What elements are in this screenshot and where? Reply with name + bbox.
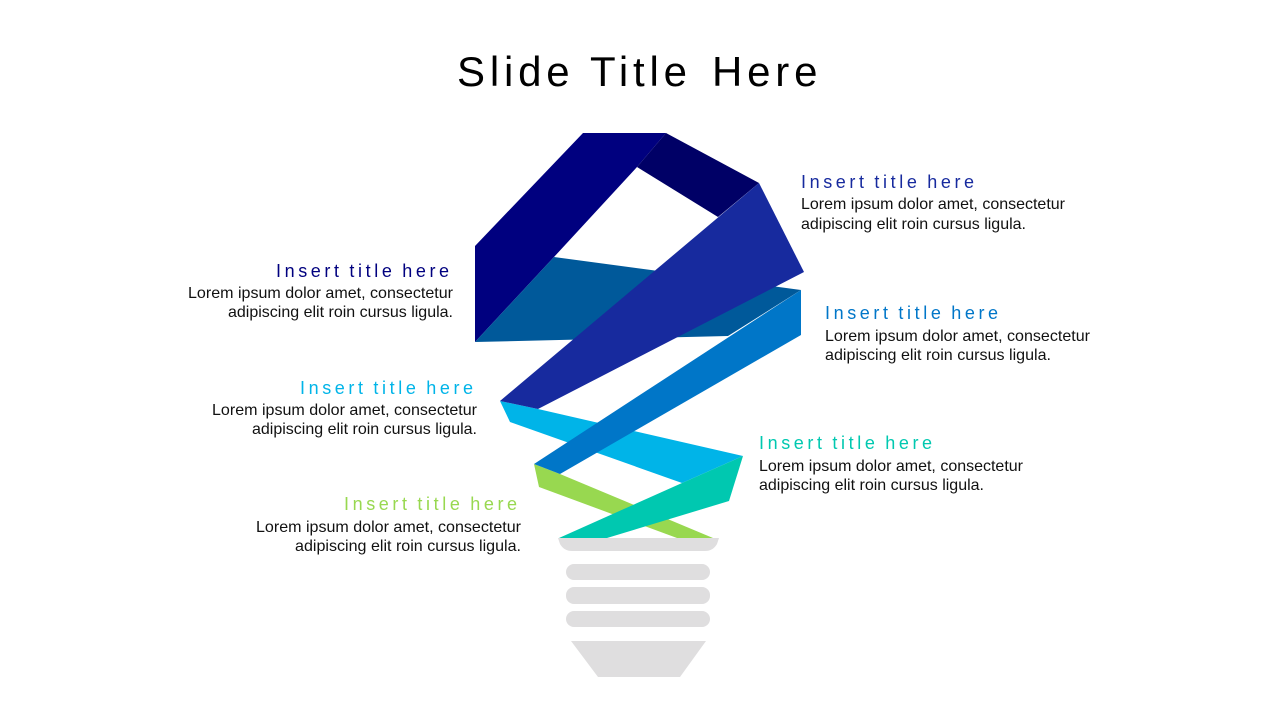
text block: green: adipiscing elit roin cursus ligula.: [295, 538, 521, 555]
title: Slide: [457, 48, 574, 95]
text block: teal: Insert title here: [759, 433, 936, 453]
bulb ribbon: teal segment: [559, 456, 743, 538]
text block: teal: adipiscing elit roin cursus ligula.: [759, 477, 984, 494]
bulb ribbon: sky blue segment: [500, 401, 743, 483]
text block: teal: Lorem ipsum dolor amet, consectetur: [759, 458, 1024, 475]
bulb ribbon: mid blue segment: [534, 290, 801, 474]
text block: sky blue: adipiscing elit roin cursus ligula.: [252, 421, 477, 438]
title: Title: [590, 48, 692, 95]
light bulb graphic: [475, 133, 804, 677]
bulb base: tip: [571, 641, 706, 677]
text block: sky blue: Lorem ipsum dolor amet, consectetur: [212, 402, 478, 419]
text block: sky blue: Insert title here: [300, 378, 477, 398]
text block: navy: Insert title here: [276, 261, 453, 281]
text block: royal blue: [801, 172, 1066, 233]
text block: mid blue: Lorem ipsum dolor amet, consectetur: [825, 328, 1091, 345]
bulb ribbon: dark navy segment: [637, 133, 759, 217]
text block: navy: Lorem ipsum dolor amet, consectetur: [188, 285, 454, 302]
title: Here: [712, 48, 822, 95]
text block: sky blue: [212, 378, 478, 438]
bulb base: collar: [558, 538, 719, 551]
text block: teal: [759, 433, 1024, 494]
text block: mid blue: adipiscing elit roin cursus ligula.: [825, 347, 1051, 364]
text block: green: Lorem ipsum dolor amet, consectetur: [256, 519, 522, 536]
text block: royal blue: adipiscing elit roin cursus ligula.: [801, 216, 1026, 233]
bulb ribbon: steel blue segment: [475, 257, 801, 342]
bulb ribbon: navy segment: [475, 133, 666, 342]
bulb base: thread 3: [566, 611, 710, 627]
text block: royal blue: Insert title here: [801, 172, 978, 192]
text block: mid blue: [825, 303, 1091, 364]
bulb ribbon: royal blue segment: [500, 183, 804, 409]
text block: navy: adipiscing elit roin cursus ligula.: [228, 304, 453, 321]
text block: green: Insert title here: [344, 494, 521, 514]
bulb ribbon: green segment: [534, 464, 713, 538]
text block: royal blue: Lorem ipsum dolor amet, consectetur: [801, 196, 1066, 213]
text block: navy: [188, 261, 454, 321]
text block: mid blue: Insert title here: [825, 303, 1002, 323]
bulb base: thread 2: [566, 587, 710, 604]
text block: green: [256, 494, 522, 555]
bulb base: thread 1: [566, 564, 710, 580]
